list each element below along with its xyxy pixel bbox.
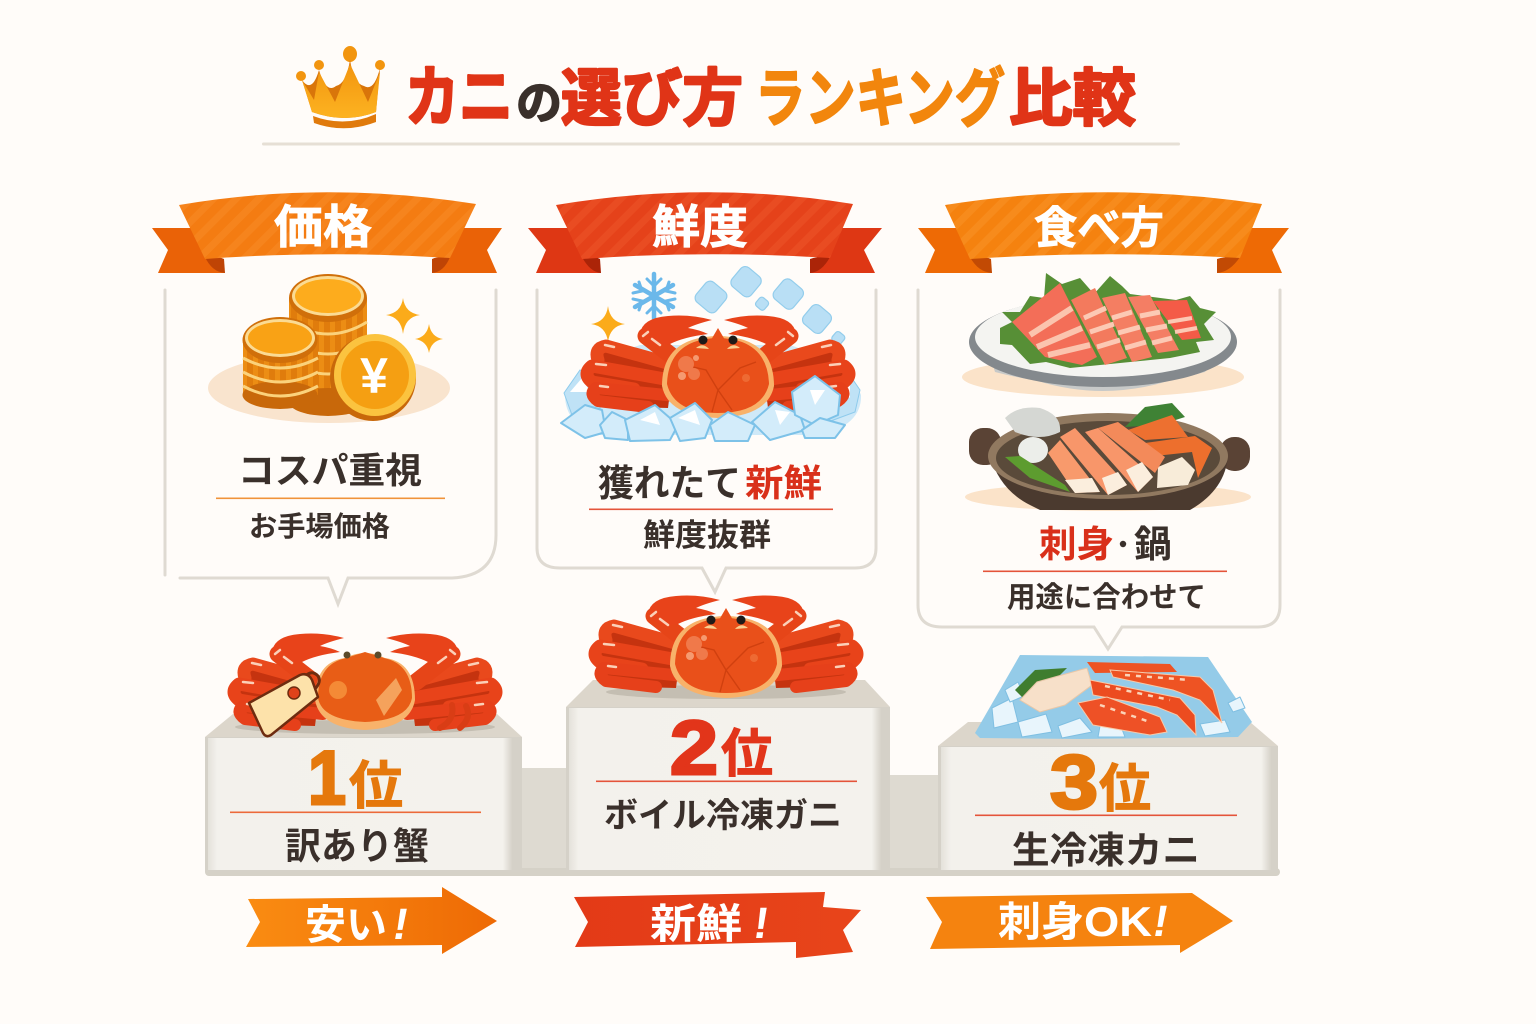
arrow: cheap — [246, 887, 497, 954]
product: damaged crab: 訳あり蟹 — [285, 826, 429, 867]
product: raw frozen crab: 生冷凍カニ — [1012, 830, 1200, 871]
ribbon: price: 価格 — [274, 201, 372, 253]
ribbon: price — [152, 192, 502, 273]
rank: 1st: 位 — [349, 758, 403, 816]
arrow: fresh: ! — [751, 899, 772, 948]
rank: 3rd: 位 — [1099, 761, 1151, 819]
illustration: coins: ¥ — [360, 348, 388, 404]
heading: freshly caught: 獲れたて — [598, 463, 741, 504]
arrow: cheap: 安い — [305, 902, 387, 948]
speech bubble: how to eat — [918, 290, 1280, 649]
rank: 1st: 1 — [308, 736, 346, 821]
arrow: sashimi ok: ! — [1149, 897, 1172, 946]
arrow: sashimi ok: 刺身 — [998, 899, 1084, 945]
speech bubble: freshness — [537, 290, 876, 592]
icon: sparkle — [591, 306, 625, 342]
text: affordable price: お手場価格 — [249, 511, 390, 542]
rank: 2nd: 2 — [670, 706, 718, 791]
arrow: sashimi ok: OK — [1084, 898, 1152, 945]
illustration: coins — [208, 274, 450, 423]
title — [296, 46, 1136, 135]
rank: 1st — [308, 736, 403, 821]
speech bubble: price — [165, 290, 496, 604]
panel: how to eat — [918, 192, 1289, 649]
ribbon: freshness: 鮮度 — [652, 201, 748, 253]
panel: freshness — [528, 192, 882, 592]
podium block 3 — [938, 722, 1278, 746]
arrow: fresh: 新鮮 — [650, 901, 742, 947]
rank: 2nd — [670, 706, 773, 791]
title text: の: の — [516, 77, 562, 129]
podium: rank 2 — [566, 596, 890, 872]
illustration: ice blocks front — [561, 376, 845, 441]
illustration: discount crab with tag — [233, 634, 497, 734]
arrow: fresh — [574, 892, 861, 958]
ribbon: how to eat — [918, 192, 1289, 273]
text: outstanding freshness: 鮮度抜群 — [643, 518, 771, 553]
rank: 3rd — [1050, 740, 1151, 825]
podium: rank 3 — [938, 655, 1278, 872]
rank: 3rd: 3 — [1050, 740, 1098, 825]
illustration: crab hot pot — [965, 403, 1251, 511]
heading: dot separator — [1120, 541, 1126, 547]
arrow: sashimi ok — [926, 893, 1233, 953]
icon: price tag — [249, 673, 319, 736]
title text: red part: カニ — [405, 60, 513, 134]
heading: sashimi: 刺身 — [1039, 524, 1114, 565]
heading: cost performance: コスパ重視 — [238, 450, 422, 491]
illustration: boiled crab — [594, 596, 858, 699]
heading: hot pot: 鍋 — [1134, 524, 1172, 565]
arrow: cheap: ! — [389, 900, 412, 949]
icon: snowflake — [633, 274, 675, 318]
ribbon: how to eat: 食べ方 — [1034, 204, 1164, 253]
icon: crown — [296, 46, 385, 128]
illustration: snow crab on ice — [586, 316, 850, 418]
ribbon: freshness — [528, 192, 882, 273]
podium base — [205, 768, 1280, 876]
title text: ランキング: ランキング — [755, 63, 1005, 135]
illustration: sashimi plate — [962, 273, 1244, 397]
illustration: ice bed back — [564, 345, 861, 435]
text: choose by use: 用途に合わせて — [1007, 581, 1206, 614]
podium block 1 — [205, 714, 522, 737]
icons: ice cubes — [693, 264, 846, 346]
icon: sparkles — [386, 298, 443, 353]
title text: 選び方: 選び方 — [561, 65, 743, 134]
heading: fresh highlight: 新鮮 — [745, 463, 822, 504]
product: boiled frozen crab: ボイル冷凍ガニ — [604, 797, 842, 835]
rank: 2nd: 位 — [721, 726, 773, 784]
panel: price — [152, 192, 502, 604]
podium: rank 1 — [205, 634, 522, 872]
title text: 比較: 比較 — [1009, 65, 1136, 134]
illustration: raw frozen crab legs on ice — [975, 655, 1252, 739]
podium block 2 — [566, 680, 890, 707]
